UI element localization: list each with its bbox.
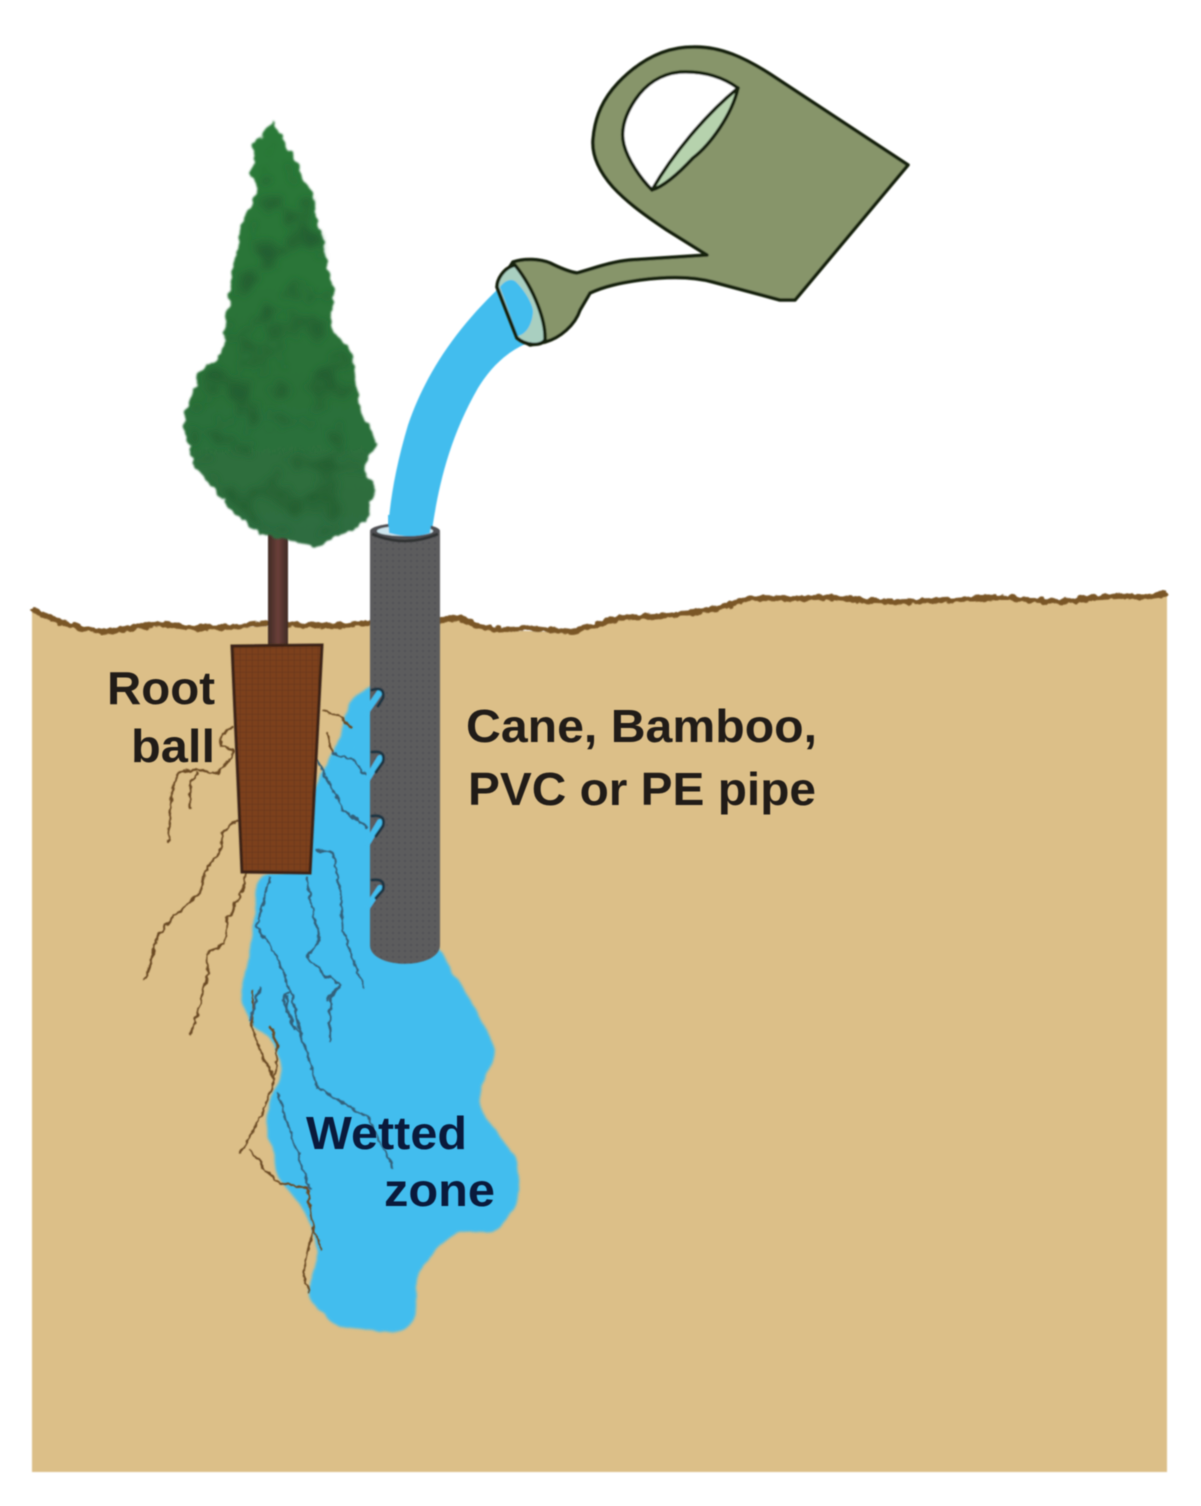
tree: [183, 122, 377, 647]
icon: watering can: [497, 47, 908, 345]
pipe: [366, 515, 440, 964]
label: wetted zone: zone: [384, 1164, 495, 1216]
stream entering pipe: [388, 515, 432, 536]
trunk: [268, 530, 288, 647]
roots in wet soil: [250, 753, 393, 1190]
label: root ball: [107, 662, 215, 772]
can body with handle and spout: [497, 47, 908, 345]
can inner sliver: [652, 88, 738, 190]
water in rose: [500, 280, 533, 336]
root ball: [232, 645, 322, 873]
tree roots: [145, 710, 393, 1293]
label: pipe: Cane, Bamboo,: [466, 700, 817, 752]
rose face: [497, 265, 545, 344]
label: pipe: PVC or PE pipe: [468, 763, 816, 815]
label: root ball: Root: [107, 662, 215, 714]
outflow holes: [366, 689, 384, 906]
foliage: [183, 122, 377, 546]
wetted zone water: [241, 680, 520, 1333]
pipe opening: [370, 523, 440, 539]
roots in dry soil: [145, 710, 350, 1293]
panel: soil cross-section: [32, 593, 1167, 1472]
label: wetted zone: [306, 1107, 495, 1216]
label: root ball: ball: [131, 720, 215, 772]
label: wetted zone: Wetted: [306, 1107, 467, 1159]
stream of water from can: [388, 288, 525, 530]
handle opening: [623, 72, 738, 190]
label: pipe: [466, 700, 817, 815]
